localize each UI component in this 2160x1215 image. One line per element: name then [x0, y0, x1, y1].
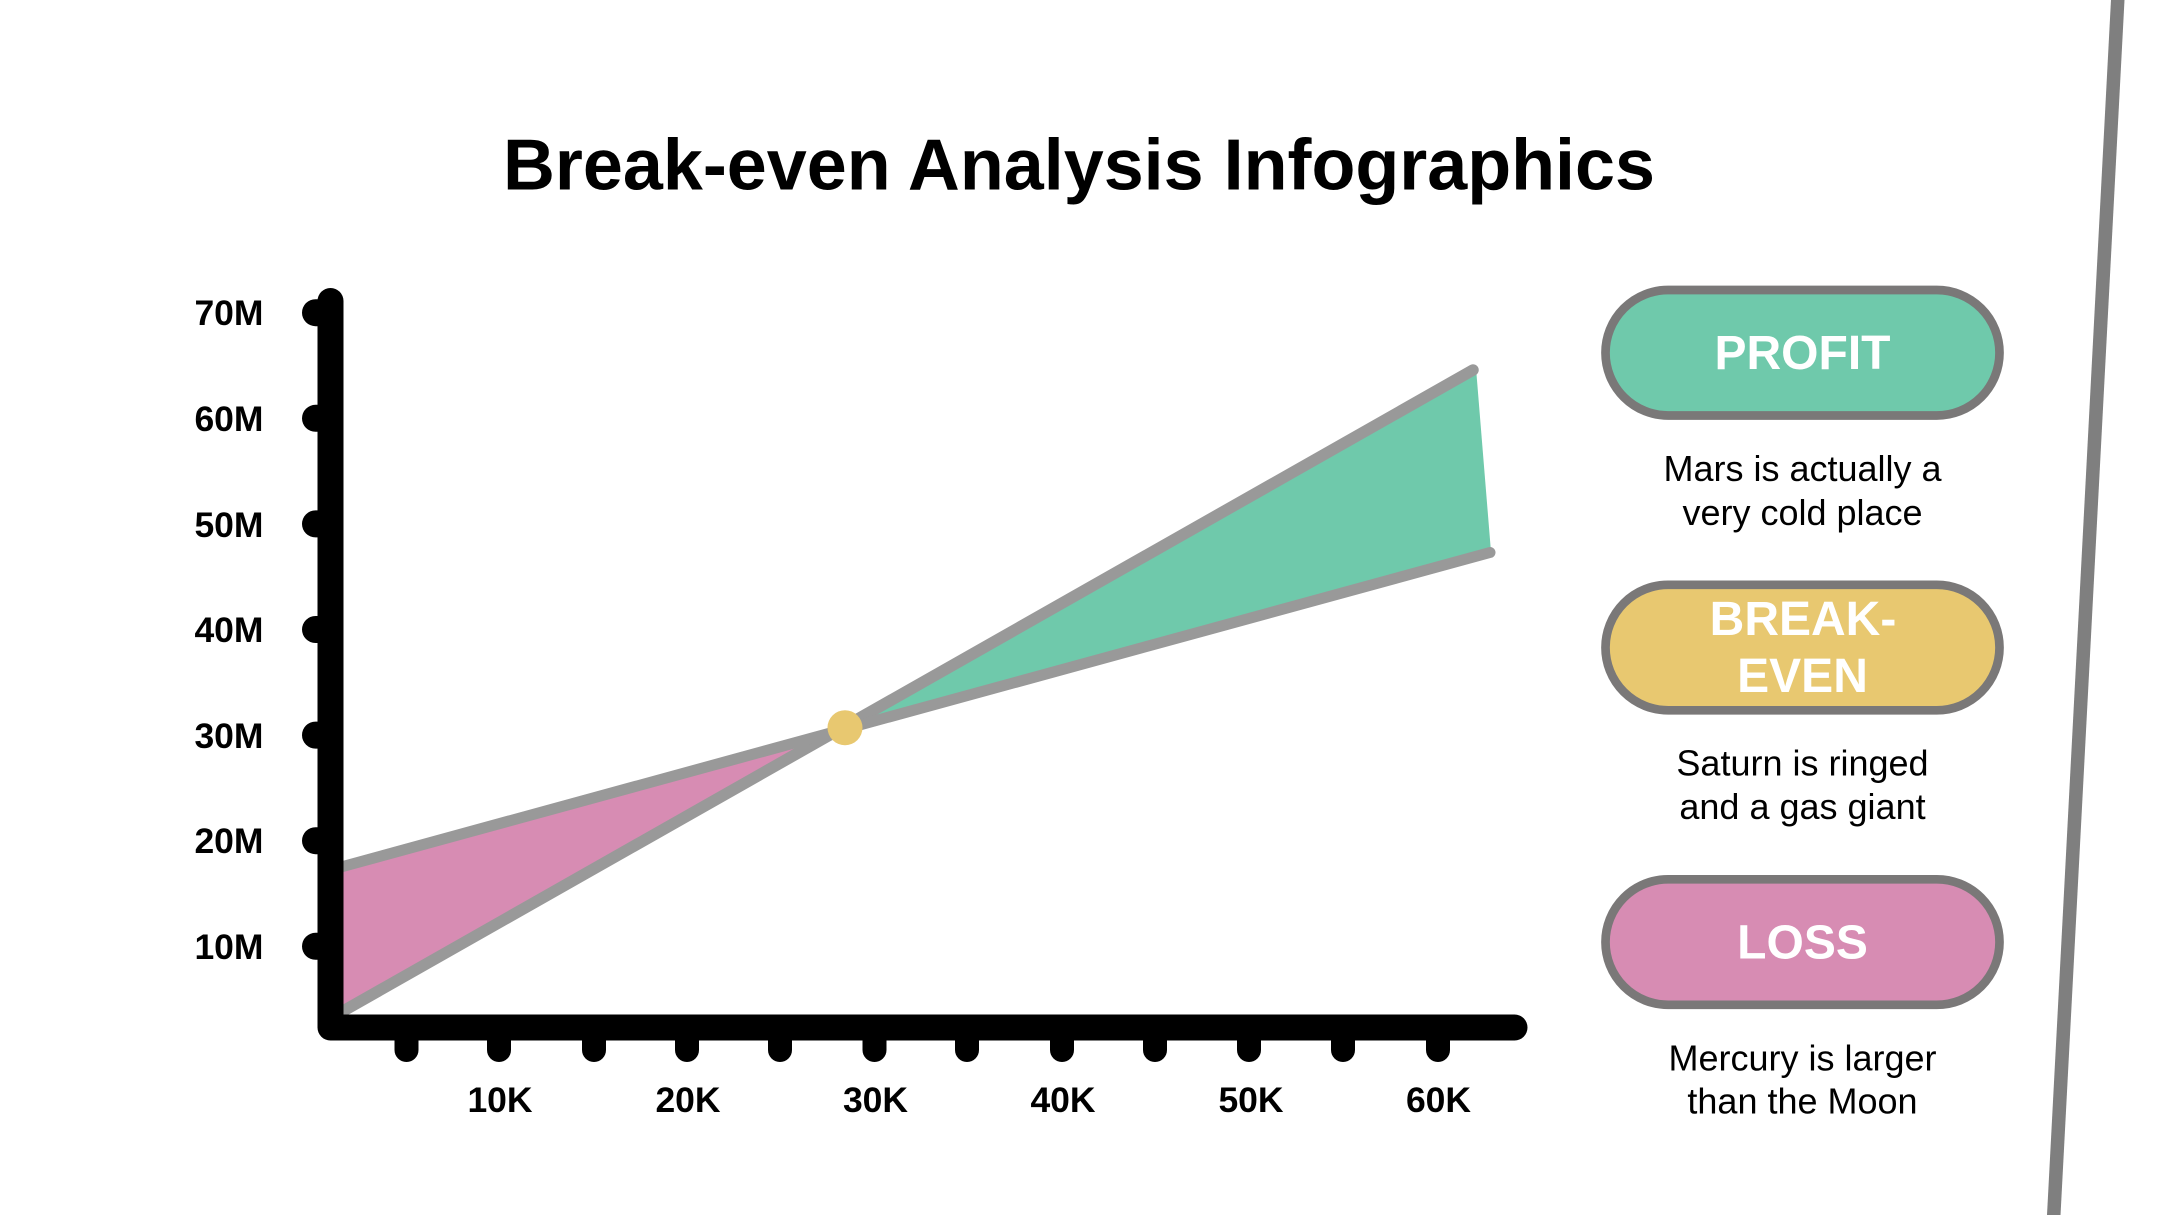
axes	[330, 301, 1514, 1028]
loss label: LOSS	[1737, 917, 1868, 970]
break-even chart	[194, 293, 1514, 1120]
revenue line	[330, 370, 1473, 1018]
x axis labels: 40K	[1030, 1080, 1096, 1120]
loss pill	[1606, 879, 2000, 1005]
profit area	[842, 368, 1491, 729]
break-even label: EVEN	[1737, 650, 1868, 703]
break-even label: BREAK-	[1710, 593, 1896, 646]
x axis labels: 10K	[467, 1080, 533, 1120]
x axis labels	[467, 1080, 1471, 1120]
y axis labels: 10M	[194, 927, 264, 967]
x axis labels: 20K	[655, 1080, 721, 1120]
x axis labels: 30K	[843, 1080, 908, 1120]
break-even description: Saturn is ringed	[1676, 742, 1929, 784]
title: Break-even Analysis Infographics	[503, 126, 1655, 206]
profit label: PROFIT	[1714, 327, 1890, 380]
y axis labels: 60M	[194, 399, 264, 439]
legend: break-even: and a gas giant	[1679, 786, 1926, 827]
y axis labels: 20M	[194, 821, 264, 861]
break-even pill	[1606, 585, 2000, 710]
diagonal edge line	[2054, 0, 2118, 1215]
y axis labels: 40M	[194, 610, 264, 650]
legend: loss: than the Moon	[1687, 1081, 1918, 1122]
y axis labels: 70M	[194, 293, 264, 333]
y axis ticks	[302, 299, 342, 960]
loss area	[342, 729, 842, 1012]
legend: loss	[1606, 879, 2000, 1122]
y axis labels: 30M	[194, 716, 264, 756]
y axis labels: 50M	[194, 505, 264, 545]
loss description: Mercury is larger	[1668, 1038, 1937, 1078]
legend: profit	[1606, 290, 2000, 533]
break-even point	[828, 710, 862, 745]
legend: profit: very cold place	[1682, 492, 1923, 533]
x axis ticks	[394, 1025, 1450, 1062]
y axis labels	[194, 293, 264, 967]
x axis labels: 60K	[1406, 1080, 1471, 1120]
profit pill	[1606, 290, 2000, 416]
legend: break-even	[1606, 585, 2000, 827]
cost line	[330, 552, 1490, 870]
x axis labels: 50K	[1218, 1080, 1284, 1120]
profit description: Mars is actually a	[1663, 448, 1943, 489]
